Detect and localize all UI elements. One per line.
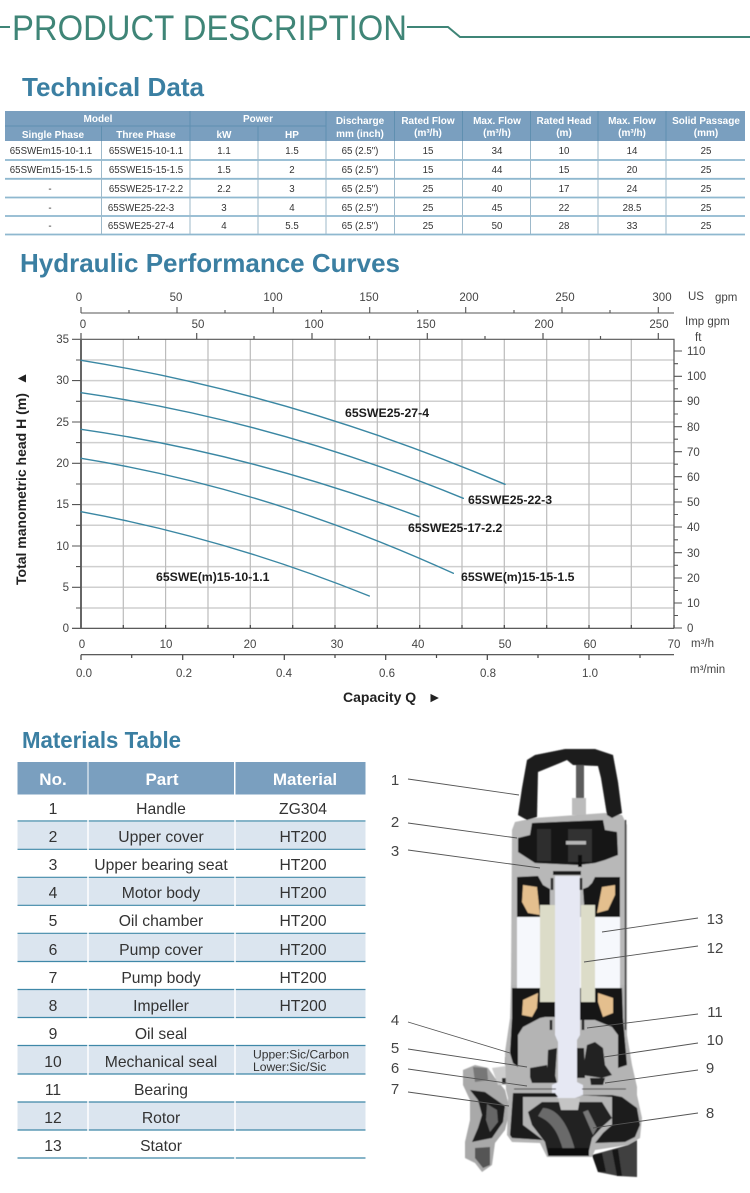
top axis labels: 100 bbox=[263, 292, 283, 304]
part numbers: 6 bbox=[391, 1060, 399, 1077]
technical data table: 2 bbox=[289, 165, 295, 176]
bottom axis labels: 0.0 bbox=[76, 668, 92, 680]
icon: upper windings bbox=[522, 885, 615, 915]
bottom axis labels: m³/h bbox=[691, 638, 714, 650]
materials table: Material bbox=[273, 770, 337, 789]
bottom axis labels: 0.8 bbox=[480, 668, 496, 680]
icon: lower black chamber bbox=[510, 988, 627, 1068]
technical data table: Single Phase bbox=[22, 130, 85, 141]
icon: shaft bbox=[552, 876, 583, 1102]
materials table: 3 bbox=[49, 857, 58, 874]
technical data table: 2.2 bbox=[217, 184, 231, 195]
technical data table: Solid Passage bbox=[672, 116, 740, 127]
materials table: 4 bbox=[49, 885, 58, 902]
bottom axis labels: 0.2 bbox=[176, 668, 192, 680]
top axis labels: 200 bbox=[534, 319, 554, 331]
part numbers: 2 bbox=[391, 814, 399, 831]
part numbers: 13 bbox=[707, 911, 723, 928]
technical data table: 5.5 bbox=[285, 221, 299, 232]
materials table: HT200 bbox=[279, 970, 327, 987]
technical data table: 28.5 bbox=[623, 203, 641, 214]
part numbers: 10 bbox=[707, 1032, 723, 1049]
materials table: 2 bbox=[49, 829, 57, 846]
technical data table: 65SWEm15-15-1.5 bbox=[10, 165, 92, 176]
bottom axis labels: 50 bbox=[499, 639, 511, 651]
left axis labels: 25 bbox=[56, 417, 69, 429]
technical data table: HP bbox=[285, 130, 299, 141]
curve labels: 65SWE25-17-2.2 bbox=[408, 521, 502, 535]
technical data table: 33 bbox=[627, 221, 637, 232]
technical data table: 15 bbox=[559, 165, 569, 176]
materials table: 11 bbox=[45, 1082, 61, 1099]
materials table: 10 bbox=[44, 1054, 62, 1071]
top axis labels bbox=[76, 291, 737, 344]
icon: handle bbox=[518, 749, 622, 820]
technical data table: 3 bbox=[221, 203, 227, 214]
technical data table: (m) bbox=[556, 128, 572, 139]
bottom axis labels: m³/min bbox=[690, 664, 725, 676]
bottom axis labels: 30 bbox=[331, 639, 343, 651]
bottom axis labels: 0.6 bbox=[379, 668, 395, 680]
technical data table: 65SWE15-15-1.5 bbox=[109, 165, 183, 176]
icon: stator bbox=[517, 917, 620, 988]
top axis labels: US bbox=[688, 291, 704, 303]
part numbers: 4 bbox=[391, 1012, 399, 1029]
leader lines bbox=[408, 779, 698, 1128]
bottom axis labels: 0.4 bbox=[276, 668, 293, 680]
top axis labels: Imp gpm bbox=[685, 316, 730, 328]
left axis labels: 0 bbox=[63, 623, 69, 635]
right axis labels: 90 bbox=[687, 396, 700, 408]
right axis labels: 100 bbox=[687, 371, 706, 383]
curves bbox=[81, 360, 505, 596]
part numbers bbox=[391, 772, 723, 1122]
technical data table: 15 bbox=[423, 165, 433, 176]
right axis labels: 20 bbox=[687, 573, 700, 585]
technical data table: 10 bbox=[559, 146, 570, 157]
icon: lower windings bbox=[522, 993, 613, 1017]
technical data table: 25 bbox=[423, 184, 433, 195]
icon: discharge flange bbox=[463, 1057, 515, 1172]
bottom axis labels: 10 bbox=[160, 639, 172, 651]
technical data table: Three Phase bbox=[116, 130, 176, 141]
technical data table: 65 (2.5") bbox=[342, 221, 378, 232]
technical data table: 65SWEm15-10-1.1 bbox=[10, 146, 92, 157]
icon: bearing seat details bbox=[553, 871, 581, 875]
icon: casing upper bbox=[511, 813, 627, 985]
top axis labels: gpm bbox=[715, 292, 737, 304]
materials table: Mechanical seal bbox=[105, 1054, 217, 1071]
materials table: HT200 bbox=[279, 885, 327, 902]
technical data table: 22 bbox=[559, 203, 569, 214]
chart: hydraulic performance curves bbox=[13, 291, 737, 705]
bottom axis labels bbox=[76, 638, 725, 680]
materials table: Stator bbox=[140, 1138, 182, 1155]
technical data table: 25 bbox=[701, 203, 711, 214]
technical data table: (m³/h) bbox=[618, 128, 646, 139]
part numbers: 8 bbox=[706, 1105, 714, 1122]
technical data table: mm (inch) bbox=[336, 129, 384, 140]
right axis labels: 40 bbox=[687, 522, 700, 534]
materials table: Motor body bbox=[122, 885, 200, 902]
materials table: 7 bbox=[49, 970, 57, 987]
y axis title: Total manometric head H (m) ▲ bbox=[13, 371, 29, 585]
icon: oil chamber seal cavities bbox=[530, 1042, 612, 1085]
technical data table: 1.5 bbox=[285, 146, 299, 157]
part numbers: 5 bbox=[391, 1040, 399, 1057]
technical data table: 3 bbox=[289, 184, 295, 195]
materials table: 12 bbox=[44, 1110, 62, 1127]
technical data table bbox=[5, 111, 745, 234]
technical data table: 25 bbox=[423, 221, 433, 232]
left axis labels: 20 bbox=[56, 458, 69, 470]
materials table: 13 bbox=[44, 1138, 62, 1155]
technical data table: 65 (2.5") bbox=[342, 184, 378, 195]
right axis labels: 30 bbox=[687, 548, 700, 560]
materials table: HT200 bbox=[279, 829, 327, 846]
bottom axis labels: 20 bbox=[244, 639, 256, 651]
bottom axis labels: 1.0 bbox=[582, 668, 598, 680]
bottom axis labels: 0 bbox=[79, 639, 85, 651]
technical data table: (m³/h) bbox=[483, 128, 511, 139]
technical data table: Power bbox=[243, 114, 273, 125]
part numbers: 11 bbox=[707, 1004, 723, 1021]
curve labels: 65SWE(m)15-15-1.5 bbox=[461, 570, 575, 584]
technical data table: 65 (2.5") bbox=[342, 165, 378, 176]
pump cross-section diagram bbox=[391, 749, 723, 1177]
materials table: Handle bbox=[136, 801, 186, 818]
right axis labels bbox=[687, 346, 706, 635]
technical data table: 25 bbox=[701, 221, 711, 232]
top axis labels: 200 bbox=[459, 292, 479, 304]
technical data table: Rated Head bbox=[536, 116, 592, 127]
left axis labels: 35 bbox=[56, 334, 69, 346]
right axis labels: 60 bbox=[687, 472, 700, 484]
curve labels: 65SWE25-22-3 bbox=[468, 493, 552, 507]
materials table: Upper:Sic/Carbon bbox=[253, 1048, 349, 1062]
part numbers: 7 bbox=[391, 1081, 399, 1098]
materials table: Impeller bbox=[133, 998, 189, 1015]
materials table: 1 bbox=[49, 801, 57, 818]
left axis labels: 5 bbox=[63, 582, 69, 594]
bottom axis labels: 70 bbox=[668, 639, 680, 651]
materials table: Part bbox=[145, 770, 179, 789]
top axis labels: 0 bbox=[76, 292, 82, 304]
right axis labels: 0 bbox=[687, 623, 693, 635]
technical data table: 65SWE25-22-3 bbox=[108, 203, 174, 214]
technical data table: 20 bbox=[627, 165, 638, 176]
part numbers: 1 bbox=[391, 772, 399, 789]
technical data table: 1.5 bbox=[217, 165, 231, 176]
technical data table: 65SWE25-27-4 bbox=[108, 221, 175, 232]
top axis labels: 100 bbox=[304, 319, 324, 331]
technical data table: (mm) bbox=[694, 128, 718, 139]
technical data table: 25 bbox=[701, 146, 711, 157]
curve labels: 65SWE(m)15-10-1.1 bbox=[156, 570, 270, 584]
materials table: HT200 bbox=[279, 942, 327, 959]
top axis labels: 250 bbox=[555, 292, 575, 304]
icon: shaft top bbox=[572, 765, 586, 815]
icon: shaft seals bbox=[551, 878, 583, 1030]
technical data table: 34 bbox=[492, 146, 503, 157]
materials table: No. bbox=[39, 770, 67, 789]
technical data table: 40 bbox=[492, 184, 503, 195]
x axis title: Capacity Q ► bbox=[343, 689, 442, 705]
right axis labels: 80 bbox=[687, 422, 700, 434]
part numbers: 3 bbox=[391, 843, 399, 860]
technical data table: 50 bbox=[492, 221, 503, 232]
technical data table: 65SWE25-17-2.2 bbox=[109, 184, 183, 195]
bottom axis labels: 40 bbox=[412, 639, 424, 651]
technical data table: 24 bbox=[627, 184, 638, 195]
technical data table: 65SWE15-10-1.1 bbox=[109, 146, 183, 157]
icon: motor housing black bbox=[517, 876, 620, 918]
technical data table: 44 bbox=[492, 165, 503, 176]
technical data table: 17 bbox=[559, 184, 569, 195]
technical data table: Rated Flow bbox=[401, 116, 455, 127]
icon: plate line bbox=[514, 1088, 626, 1090]
top axis labels: 150 bbox=[416, 319, 436, 331]
right axis labels: 110 bbox=[687, 346, 705, 358]
technical data table: 1.1 bbox=[217, 146, 231, 157]
technical data table: 28 bbox=[559, 221, 569, 232]
heading: materials table: Materials Table bbox=[22, 727, 181, 753]
title: product description: PRODUCT DESCRIPTION bbox=[12, 9, 407, 48]
technical data table: Max. Flow bbox=[608, 116, 656, 127]
materials table: Bearing bbox=[134, 1082, 188, 1099]
technical data table: 14 bbox=[627, 146, 638, 157]
materials table: 8 bbox=[49, 998, 58, 1015]
materials table: HT200 bbox=[279, 913, 327, 930]
icon: foot bbox=[592, 1140, 637, 1177]
technical data table: kW bbox=[216, 130, 232, 141]
icon: upper chamber bbox=[518, 820, 618, 867]
technical data table: 4 bbox=[289, 203, 295, 214]
materials table bbox=[18, 762, 366, 1159]
top axis labels: 300 bbox=[652, 292, 672, 304]
technical data table: - bbox=[48, 184, 52, 195]
technical data table: 45 bbox=[492, 203, 502, 214]
technical data table: 4 bbox=[221, 221, 227, 232]
technical data table: - bbox=[48, 203, 52, 214]
materials table: HT200 bbox=[279, 857, 327, 874]
bottom axis labels: 60 bbox=[584, 639, 596, 651]
materials table: Pump body bbox=[121, 970, 201, 987]
technical data table: 25 bbox=[423, 203, 433, 214]
technical data table: Discharge bbox=[336, 116, 385, 127]
right axis labels: 10 bbox=[687, 598, 700, 610]
right axis labels: 70 bbox=[687, 447, 700, 459]
left axis labels: 30 bbox=[56, 375, 69, 387]
technical data table: Max. Flow bbox=[473, 116, 521, 127]
materials table: Oil chamber bbox=[119, 913, 203, 930]
technical data table: (m³/h) bbox=[414, 128, 442, 139]
icon: casing lower bbox=[505, 985, 642, 1157]
title: product description bbox=[0, 9, 750, 48]
technical data table: 25 bbox=[701, 165, 711, 176]
icon: rotor strips bbox=[540, 905, 595, 1002]
materials table: ZG304 bbox=[279, 801, 327, 818]
technical data table: 65 (2.5") bbox=[342, 146, 378, 157]
heading: technical data: Technical Data bbox=[22, 72, 205, 102]
technical data table: - bbox=[48, 221, 52, 232]
part numbers: 12 bbox=[707, 940, 723, 957]
materials table: 9 bbox=[49, 1026, 57, 1043]
technical data table: Model bbox=[84, 114, 113, 125]
materials table: Lower:Sic/Sic bbox=[253, 1060, 326, 1074]
materials table: 5 bbox=[49, 913, 58, 930]
top axis labels: 0 bbox=[80, 319, 86, 331]
materials table: Pump cover bbox=[119, 942, 203, 959]
curve labels bbox=[156, 406, 575, 584]
materials table: Rotor bbox=[142, 1110, 180, 1127]
technical data table: 15 bbox=[423, 146, 433, 157]
icon: volute bbox=[510, 1093, 640, 1156]
top axis labels: 250 bbox=[649, 319, 669, 331]
top axis labels: ft bbox=[695, 332, 702, 344]
curve labels: 65SWE25-27-4 bbox=[345, 406, 429, 420]
heading: hydraulic performance curves: Hydraulic Performance Curves bbox=[20, 248, 400, 278]
technical data table: 25 bbox=[701, 184, 711, 195]
top axis labels: 50 bbox=[170, 292, 182, 304]
materials table: 6 bbox=[49, 942, 58, 959]
part numbers: 9 bbox=[706, 1060, 714, 1077]
materials table: Upper bearing seat bbox=[94, 857, 228, 874]
left axis labels: 10 bbox=[56, 541, 69, 553]
right axis labels: 50 bbox=[687, 497, 700, 509]
left axis labels bbox=[56, 334, 69, 635]
materials table: Upper cover bbox=[118, 829, 204, 846]
icon: casing right edge bbox=[624, 820, 626, 1030]
top axis labels: 50 bbox=[192, 319, 204, 331]
materials table: Oil seal bbox=[135, 1026, 187, 1043]
materials table: HT200 bbox=[279, 998, 327, 1015]
left axis labels: 15 bbox=[56, 499, 69, 511]
top axis labels: 150 bbox=[359, 292, 379, 304]
technical data table: 65 (2.5") bbox=[342, 203, 378, 214]
